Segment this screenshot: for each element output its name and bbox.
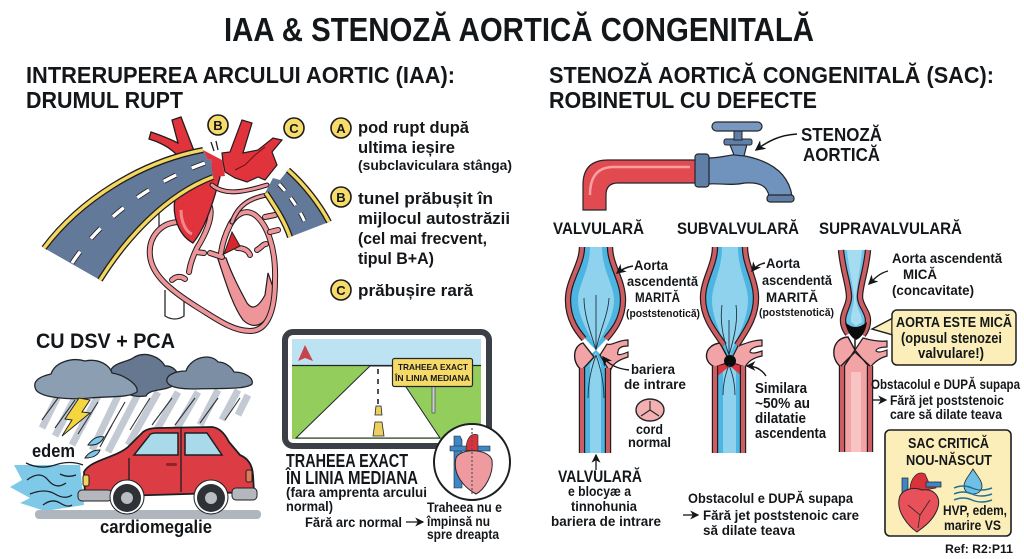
legend: B: mijlocul autostrăzii <box>358 209 510 228</box>
label: edem: edem <box>32 441 75 461</box>
text: obstacle note centre <box>683 490 859 538</box>
text: valvular annotations: (poststenotică) <box>626 308 700 320</box>
rain <box>42 390 248 452</box>
heading: IAA: DRUMUL RUPT <box>26 87 183 113</box>
legend: B: tunel prăbușit în <box>358 189 493 208</box>
heading: IAA <box>26 62 455 113</box>
panel: critical neonatal SAC <box>885 430 1011 536</box>
heading: SAC: STENOZĂ AORTICĂ CONGENITALĂ (SAC): <box>549 61 994 88</box>
illustration: navigation screen <box>285 332 489 446</box>
text: subvalvular annotations: dilatatie <box>755 411 806 427</box>
text: valvular annotations: MARITĂ <box>635 289 680 305</box>
text: trachea note: ÎN LINIA MEDIANA <box>285 467 418 488</box>
column: valvular vessel <box>568 247 628 453</box>
column headings: SUBVALVULARĂ <box>677 219 799 238</box>
red pipe <box>583 160 696 210</box>
text: subvalvular annotations: ascendenta <box>755 426 827 442</box>
text: obstacle note right: care să dilate teava <box>890 406 1002 422</box>
label: cardiomegalie: cardiomegalie <box>100 517 212 537</box>
title: IAA & STENOZĂ AORTICĂ CONGENITALĂ <box>224 11 814 48</box>
text: supravalvular annotations <box>869 250 1002 298</box>
column headings: VALVULARĂ <box>553 219 644 238</box>
torn aortic arch <box>222 120 282 182</box>
splash drops <box>85 437 104 458</box>
text: valvular annotations: bariera <box>631 361 675 377</box>
badge: diagram C <box>284 118 304 138</box>
text: subvalvular annotations: (poststenotică) <box>759 307 834 319</box>
heading: DSV + PCA: CU DSV + PCA <box>36 330 175 353</box>
text: supravalvular annotations: Aorta ascendentă <box>892 250 1002 266</box>
reference: Ref: R2:P11 <box>945 542 1013 556</box>
right road segment <box>265 170 329 237</box>
text: subvalvular annotations: Aorta <box>766 255 800 271</box>
faucet body <box>708 155 792 196</box>
text: trachea note: (fara amprenta arcului <box>286 484 427 500</box>
text: trachea note: normal) <box>286 498 333 514</box>
text: valvular annotations <box>603 257 700 392</box>
grass <box>292 365 481 439</box>
road sign: ÎN LINIA MEDIANA <box>394 372 470 383</box>
sky <box>292 339 481 365</box>
text: trachea note <box>285 451 502 542</box>
icon: normal valve: normal <box>628 434 671 450</box>
left road segment <box>44 150 225 280</box>
text: subvalvular annotations <box>747 255 834 442</box>
handle and stem <box>728 140 748 156</box>
column headings: SUPRAVALVULARĂ <box>819 219 962 238</box>
legend: A: A <box>336 121 346 136</box>
legend: A: pod rupt după <box>358 118 470 137</box>
text: subvalvular annotations: MARITĂ <box>766 289 818 305</box>
illustration: heart with broken road <box>44 115 329 331</box>
icon: normal valve: cord <box>636 421 663 437</box>
heart <box>150 207 278 331</box>
text: valvular annotations: de intrare <box>624 376 686 392</box>
compass arrow <box>298 345 313 361</box>
legend: A: (subclaviculara stânga) <box>358 157 512 173</box>
legend: C: C <box>336 283 346 298</box>
label: aortic stenosis: AORTICĂ <box>803 144 880 165</box>
badge: diagram C: C <box>289 121 299 136</box>
text: obstacle note centre: Obstacolul e DUPĂ supapa <box>688 490 853 506</box>
legend: B: tipul B+A) <box>358 249 434 268</box>
crack marks <box>211 141 218 151</box>
heading: SAC <box>549 61 994 113</box>
text: trachea note: Fără arc normal <box>305 514 402 530</box>
icon: water drop <box>954 469 992 502</box>
column: supravalvular vessel <box>834 250 887 452</box>
inset: heart with trachea midline <box>434 424 510 500</box>
road sign: TRAHEEA EXACT <box>398 362 469 372</box>
text: valvular annotations: ascendentă <box>627 273 698 289</box>
callout: small aorta: valvulare!) <box>918 346 984 362</box>
legend: C: prăbușire rară <box>358 281 474 300</box>
road <box>296 366 440 438</box>
panel: critical neonatal SAC: marire VS <box>944 518 1001 533</box>
lightning bolt <box>62 398 90 436</box>
legend: A: ultima ieșire <box>358 138 455 157</box>
column headings <box>553 219 962 238</box>
panel: critical neonatal SAC: HVP, edem, <box>943 503 1007 518</box>
panel: critical neonatal SAC: SAC CRITICĂ <box>908 435 989 452</box>
storm clouds <box>35 354 252 399</box>
road sign <box>392 358 472 413</box>
text: obstacle note right: Fără jet poststenoic <box>890 392 1004 408</box>
label: aortic stenosis <box>756 124 882 165</box>
car <box>78 427 257 514</box>
text: obstacle note centre: să dilate teava <box>703 522 795 538</box>
icon: heart <box>899 473 941 532</box>
panel: IAA <box>10 62 512 542</box>
callout: small aorta: (opusul stenozei <box>901 331 1002 347</box>
legend: B <box>331 187 510 268</box>
text: trachea note: TRAHEEA EXACT <box>286 451 408 471</box>
panel: critical neonatal SAC: NOU-NĂSCUT <box>906 452 992 469</box>
left aortic branches <box>149 117 196 165</box>
text: trachea note: Traheea nu e <box>427 500 502 515</box>
text: subvalvular annotations: Similara <box>755 381 808 397</box>
illustration: storm and car <box>10 354 261 537</box>
badge: diagram B <box>208 115 228 135</box>
flood water <box>10 462 84 511</box>
text: obstacle note right <box>871 376 1020 422</box>
pulmonary link <box>212 185 267 192</box>
ground <box>35 510 261 519</box>
text: supravalvular annotations: MICĂ <box>903 266 937 282</box>
white vessel stubs <box>159 200 184 319</box>
text: subvalvular annotations: ascendentă <box>762 272 832 288</box>
text: valvular caption: bariera de intrare <box>551 513 661 529</box>
heading: IAA: INTRERUPEREA ARCULUI AORTIC (IAA): <box>26 62 455 88</box>
column: subvalvular vessel <box>703 247 762 453</box>
text: valvular caption: e blocyæ a <box>568 483 631 499</box>
text: obstacle note centre: Fără jet poststenoic care <box>703 507 859 523</box>
legend: A <box>331 118 512 173</box>
panel: SAC <box>549 61 1020 556</box>
text: valvular annotations: Aorta <box>634 257 668 273</box>
badge: diagram B: B <box>213 118 223 133</box>
text: trachea note: spre dreapta <box>427 527 499 542</box>
text: subvalvular annotations: ~50% au <box>755 396 810 412</box>
text: valvular caption: tinnohunia <box>571 498 637 514</box>
text: valvular caption: VALVULARĂ <box>558 467 642 486</box>
heading: SAC: ROBINETUL CU DEFECTE <box>549 87 817 113</box>
ascending aorta <box>174 160 220 243</box>
callout: small aorta <box>872 310 1016 365</box>
text: supravalvular annotations: (concavitate) <box>892 282 974 298</box>
text: valvular caption <box>551 455 661 529</box>
icon: normal valve <box>628 399 671 450</box>
legend: B: B <box>336 190 346 205</box>
text: trachea note: împinsă nu <box>426 514 490 529</box>
label: aortic stenosis: STENOZĂ <box>801 124 882 145</box>
icon: faucet <box>583 122 794 210</box>
legend: B: (cel mai frecvent, <box>358 229 487 248</box>
